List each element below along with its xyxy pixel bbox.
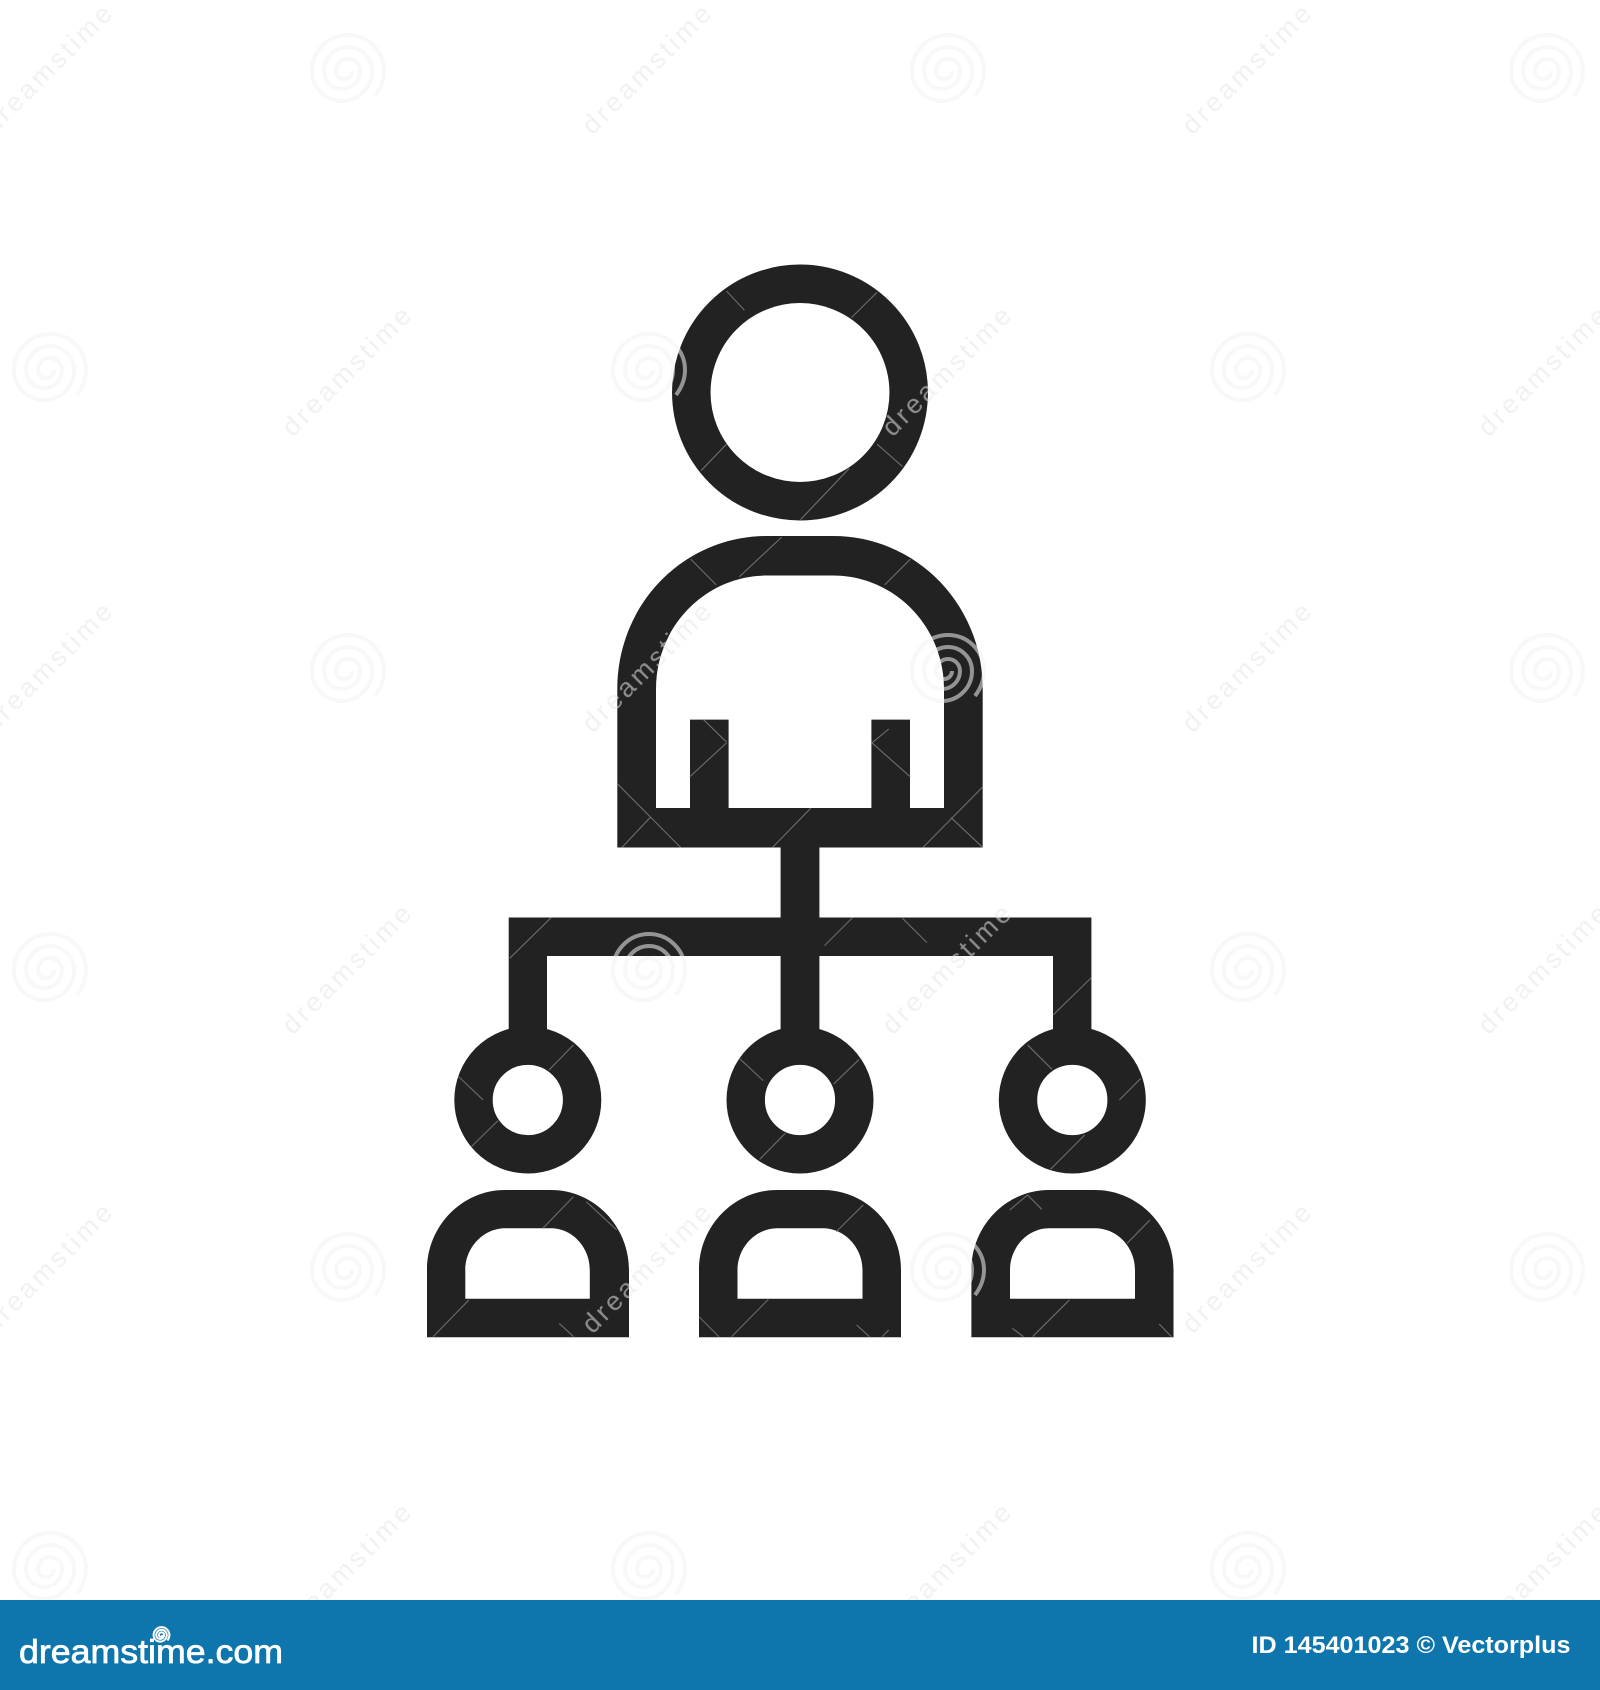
watermark: diagonal wordmarks: dreamstime <box>276 301 417 442</box>
watermark: diagonal wordmarks: dreamstime <box>876 301 1017 442</box>
photo id and credit: ID 145401023 © Vectorplus <box>1252 1632 1570 1659</box>
watermark: diagonal wordmarks: dreamstime <box>1176 1198 1317 1339</box>
icon: logo spiral <box>154 1627 169 1642</box>
watermark: diagonal wordmarks: dreamstime <box>576 0 717 140</box>
icon: manager head <box>691 284 909 501</box>
icon: centre report <box>699 1046 901 1337</box>
watermark: diagonal wordmarks: dreamstime <box>1176 597 1317 738</box>
watermark: diagonal wordmarks: dreamstime <box>576 1198 717 1339</box>
watermark: diagonal wordmarks: dreamstime <box>1176 0 1317 140</box>
connector: org chart lines <box>509 847 1091 1040</box>
icon: left report <box>427 1046 629 1337</box>
icon: right report <box>971 1046 1174 1337</box>
icon: hierarchy of people <box>427 284 1174 1337</box>
watermark: diagonal wordmarks: dreamstime <box>876 899 1017 1040</box>
watermark: diagonal wordmarks: dreamstime <box>876 1498 1017 1639</box>
logo: dreamstime.com: dreamstime.com <box>19 1633 283 1670</box>
watermark: diagonal wordmarks: dreamstime <box>276 1498 417 1639</box>
icon: manager body <box>617 536 983 848</box>
watermark: diagonal wordmarks: dreamstime <box>576 597 717 738</box>
footer bar <box>0 1600 1600 1690</box>
watermark: diagonal wordmarks: dreamstime <box>276 899 417 1040</box>
